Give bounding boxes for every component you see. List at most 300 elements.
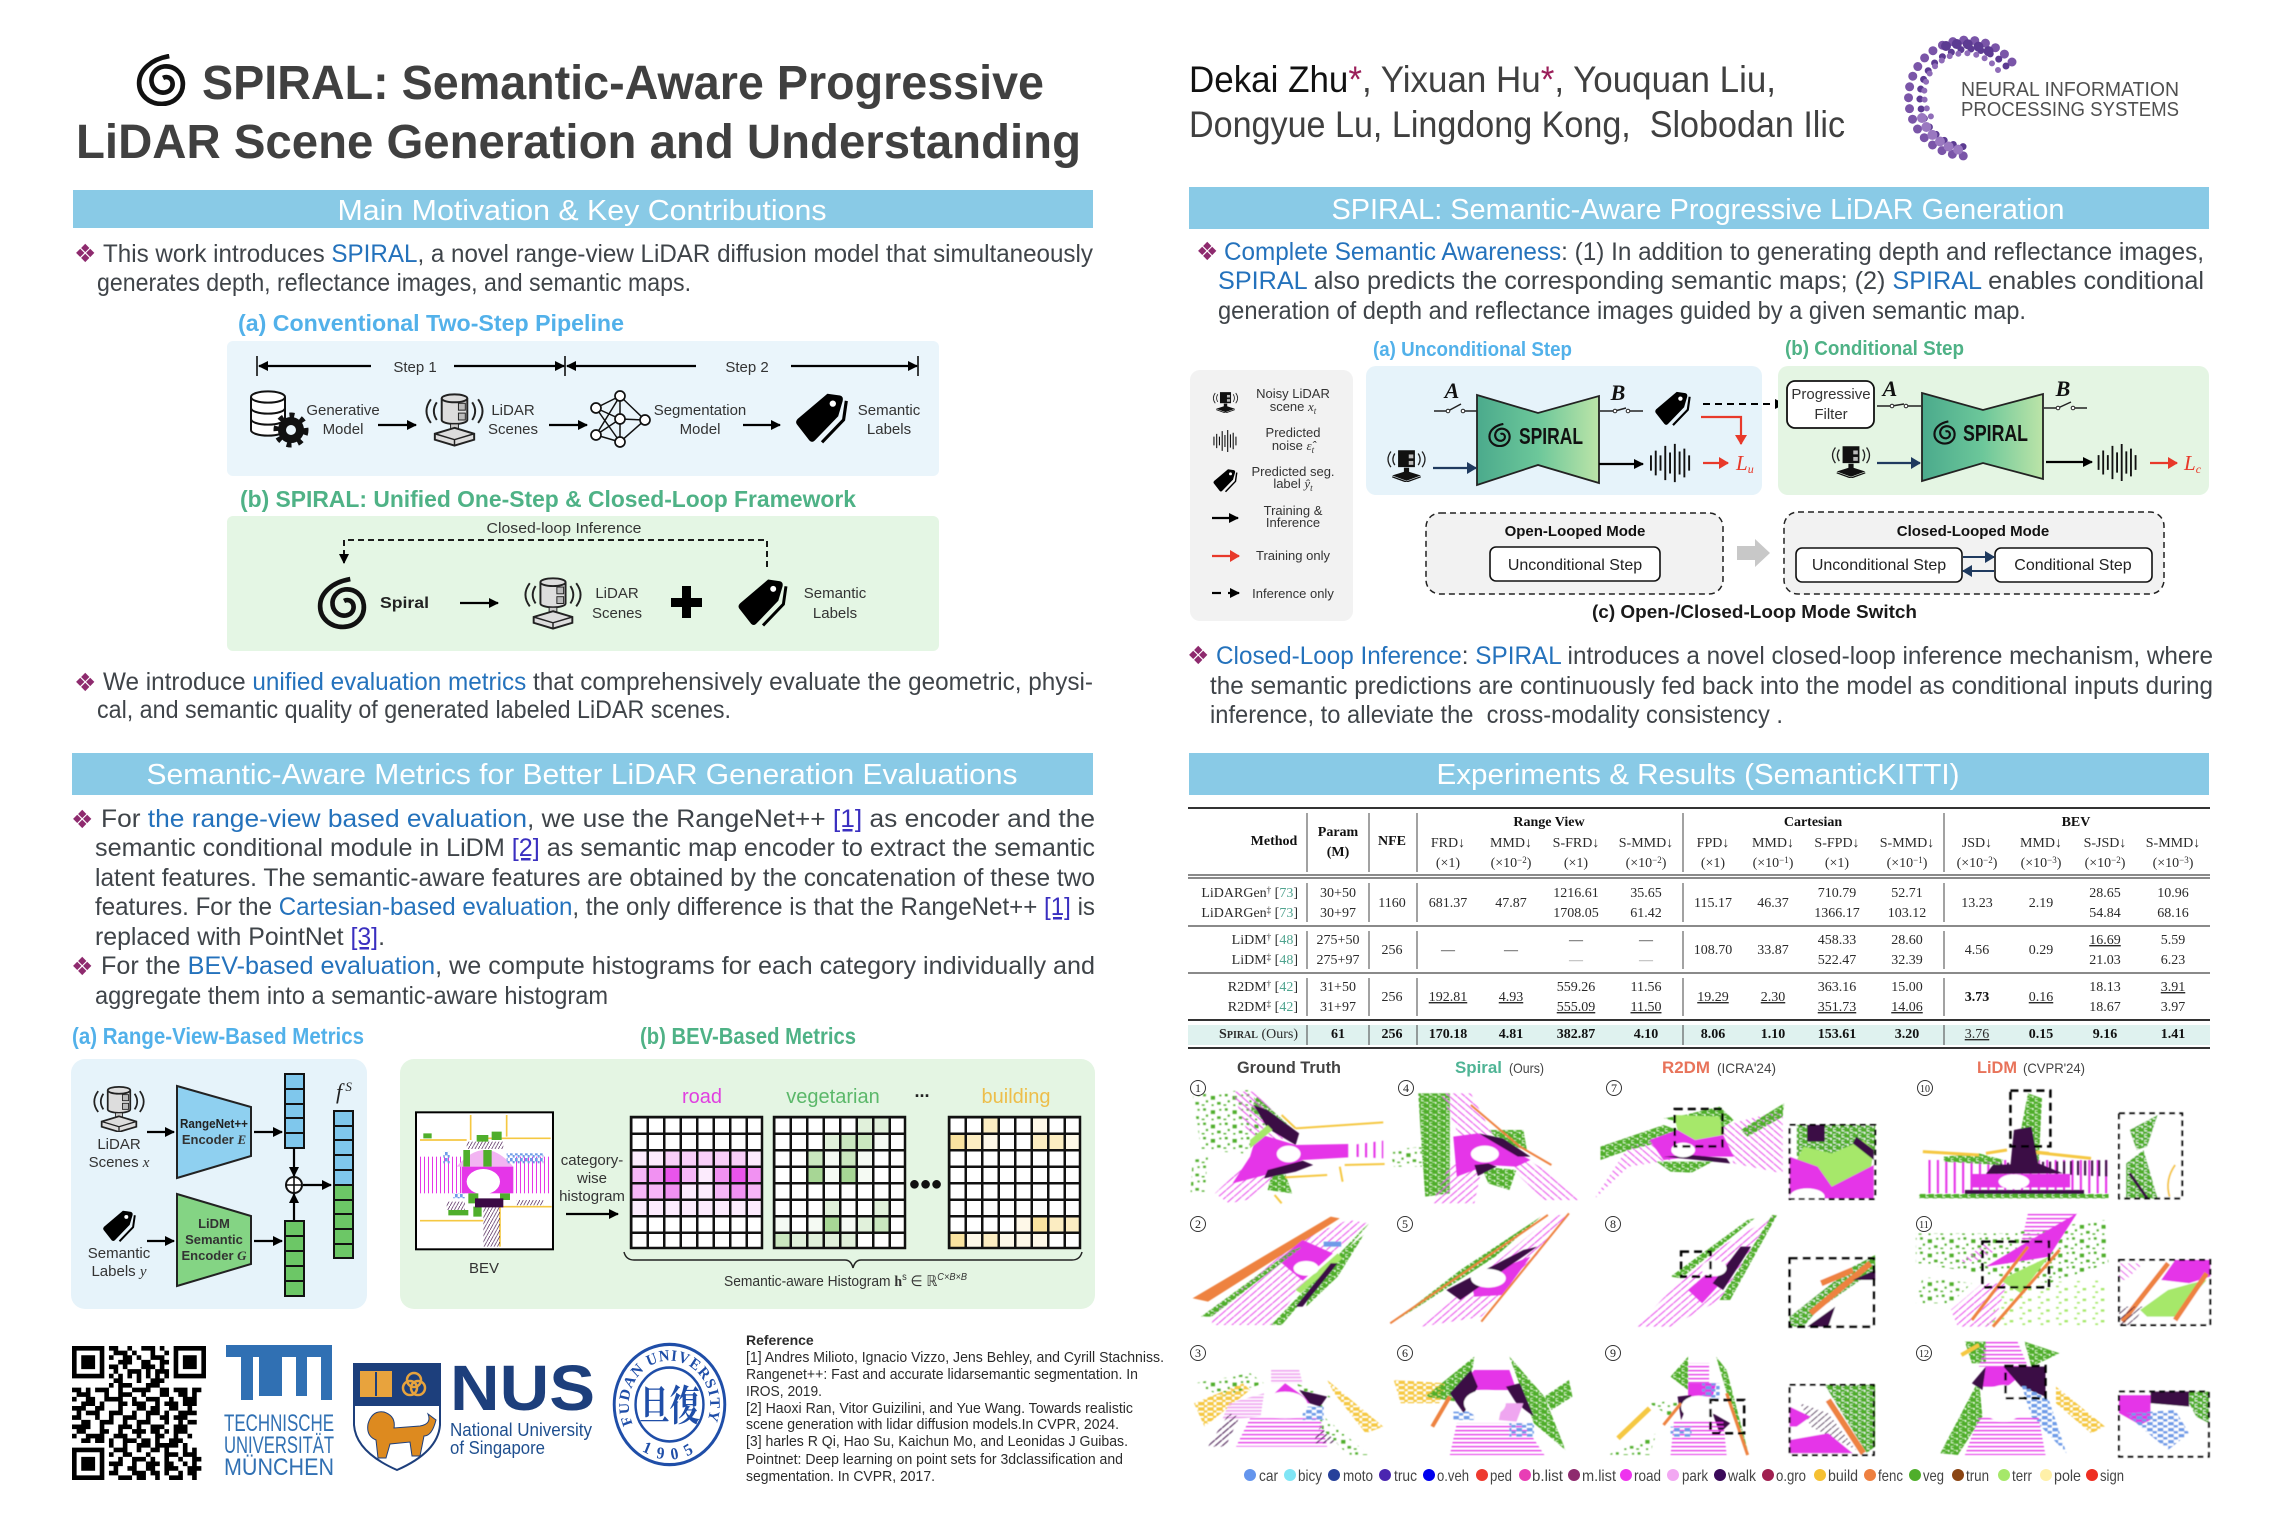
diagram: unconditional step (1366, 366, 1762, 495)
row: SPIRAL ours: Spiral (Ours) (1219, 1027, 1298, 1042)
row: SPIRAL ours: 153.61 (1818, 1027, 1856, 1042)
rows: LiDM: [ (1271, 953, 1280, 968)
rows: R2DM: 3.73 (1965, 990, 1989, 1005)
rows: R2DM: 15.00 (1891, 980, 1923, 995)
heading (72, 753, 1093, 795)
rows: R2DM: 363.16 (1818, 980, 1856, 995)
rows: LiDARGen: 10.96 (2157, 886, 2189, 901)
rows: R2DM: 4.93 (1499, 990, 1523, 1005)
authors (1189, 59, 1845, 145)
rows: LiDARGen: LiDARGen (1201, 886, 1267, 901)
diagram: conventional pipeline: LiDAR (491, 402, 535, 419)
logo: NeurIPS (1909, 40, 2179, 156)
rows: LiDM: [ (1271, 933, 1280, 948)
legend: t (1310, 483, 1313, 493)
legend: t (1312, 445, 1315, 455)
table header: MMD↓ (1490, 836, 1532, 851)
progressive filter (1787, 381, 1874, 428)
inset 9 (1790, 1385, 1875, 1455)
diagram: range-view metrics: Labels y (91, 1263, 147, 1280)
rows: LiDM: 48] (1279, 933, 1298, 948)
legend: Noisy LiDAR (1256, 386, 1330, 401)
diagram: spiral framework: LiDAR (595, 585, 639, 602)
column headers: qualitative comparison: Ground Truth (1237, 1058, 1341, 1077)
diagram: BEV metrics: BEV (469, 1260, 499, 1277)
heading: conventional pipeline: (a) Conventional Two-Step Pipeline (238, 310, 624, 336)
table header: (M) (1327, 845, 1350, 860)
fusion node (286, 1177, 302, 1193)
rows: R2DM: 555.09 (1557, 1000, 1595, 1015)
inset 11 (2119, 1260, 2210, 1325)
rows: R2DM: 2.30 (1761, 990, 1785, 1005)
row: SPIRAL ours: 4.81 (1499, 1027, 1523, 1042)
panel: open-looped mode: Open-Looped Mode (1505, 523, 1645, 540)
icon: database and gear (251, 391, 306, 445)
legend: semantic classes (1244, 1468, 2124, 1485)
table header: Method (1251, 834, 1298, 849)
legend: semantic classes: trun (1966, 1468, 1989, 1485)
title (76, 56, 1081, 169)
legend: scene x (1270, 399, 1314, 414)
BEV image (416, 1112, 553, 1249)
encoder: RangeNet++: RangeNet++ (180, 1116, 248, 1131)
rows: R2DM: R2DM (1228, 980, 1267, 995)
legend: Inference (1266, 515, 1320, 530)
logo: NeurIPS: PROCESSING SYSTEMS (1961, 99, 2179, 121)
column headers: qualitative comparison: LiDM (1977, 1058, 2017, 1077)
row: SPIRAL ours: 3.20 (1895, 1027, 1919, 1042)
scene 12 (1940, 1342, 2105, 1455)
text block: unified metrics bullet (74, 668, 1093, 724)
rows: LiDARGen: 681.37 (1429, 896, 1467, 911)
table header: S-JSD↓ (2084, 836, 2126, 851)
heading: Semantic-Aware Metrics for Better LiDAR Generation Evaluations (146, 759, 1017, 791)
references: segmentation. In CVPR, 2017. (746, 1468, 935, 1485)
table header: BEV (2062, 815, 2090, 830)
panel: closed-looped mode (1784, 512, 2164, 594)
inset 8 (1790, 1255, 1875, 1327)
diagram: range-view metrics: Semantic (88, 1245, 151, 1262)
diagram: spiral framework: Labels (813, 605, 857, 622)
heading: BEV metrics: (b) BEV-Based Metrics (640, 1023, 856, 1049)
text block: intro bullet: This work introduces SPIRAL, a novel range-view LiDAR diffusion model that simultaneously (103, 240, 1093, 268)
heading: SPIRAL: Semantic-Aware Progressive LiDAR Generation (1332, 194, 2064, 226)
legend: semantic classes: truc (1394, 1468, 1417, 1485)
rows: LiDM: 522.47 (1818, 953, 1856, 968)
diagram: conventional pipeline: Generative (306, 402, 380, 419)
diagram: BEV metrics: histogram (559, 1188, 625, 1205)
legend: semantic classes: park (1682, 1468, 1709, 1485)
rows: R2DM: [ (1271, 1000, 1280, 1015)
rows: R2DM: R2DM (1228, 1000, 1267, 1015)
logo: Fudan seal: 旦復 (639, 1371, 700, 1433)
rows: LiDARGen: 35.65 (1630, 886, 1662, 901)
text block: intro bullet (74, 239, 1093, 297)
table header: FRD↓ (1431, 836, 1465, 851)
table header: (×10 (1887, 856, 1913, 871)
rows: R2DM: 11.56 (1631, 980, 1661, 995)
rows: LiDM: 0.29 (2029, 943, 2053, 958)
scene 3 (1194, 1370, 1383, 1455)
rows: LiDM: — (1568, 933, 1584, 948)
legend: Predicted seg. (1251, 464, 1335, 479)
text block: complete semantic awareness: Complete Semantic Awareness: (1) In addition to generating depth and reflectance images, (1224, 238, 2204, 266)
rows: LiDM: 275+97 (1317, 953, 1359, 968)
table header: MMD↓ (2020, 836, 2062, 851)
table header: ) (2189, 856, 2194, 871)
row: SPIRAL ours: 1.41 (2161, 1027, 2185, 1042)
rows: LiDM: † (1267, 932, 1272, 942)
diagram: conventional pipeline (227, 341, 939, 476)
inset 10 (2119, 1113, 2182, 1198)
rows: LiDARGen: 61.42 (1630, 906, 1662, 921)
legend: semantic classes: fenc (1878, 1468, 1903, 1485)
SPIRAL block (1477, 395, 1599, 485)
legend: noise ε̂ (1272, 438, 1312, 453)
legend: semantic classes: veg (1923, 1468, 1944, 1485)
logo: NUS: of Singapore (450, 1438, 545, 1458)
text block: closed-loop inference: Closed-Loop Inference: SPIRAL introduces a novel closed-loop inference mechanism, where (1216, 642, 2213, 670)
table header: (×10 (1626, 856, 1652, 871)
table header: ) (1527, 856, 1532, 871)
rows: R2DM: 256 (1382, 990, 1402, 1005)
rows: LiDARGen (1201, 885, 2189, 921)
legend: semantic classes: walk (1727, 1468, 1757, 1485)
diagram: unconditional step: B (1610, 380, 1625, 405)
scene numbers: 12 (1919, 1349, 1929, 1360)
scene 8 (1636, 1215, 1777, 1327)
table header: S-MMD↓ (1619, 836, 1673, 851)
diagram: BEV metrics: Semantic-aware Histogram h (724, 1273, 905, 1290)
legend: semantic classes: ped (1490, 1468, 1512, 1485)
scene numbers (1190, 1080, 1932, 1360)
diagram: BEV metrics: wise (576, 1170, 607, 1187)
logo: Fudan seal (612, 1342, 726, 1466)
row: SPIRAL ours: 9.16 (2093, 1027, 2117, 1042)
rows: R2DM: 19.29 (1697, 990, 1729, 1005)
column headers: qualitative comparison (1237, 1058, 2085, 1077)
text block: metrics description (71, 805, 1095, 1010)
text block: unified metrics bullet: ❖ (74, 668, 96, 697)
row: SPIRAL ours: 3.76 (1965, 1027, 1989, 1042)
rows: LiDARGen: 28.65 (2089, 886, 2121, 901)
diagram: conventional pipeline: Scenes (488, 421, 538, 438)
logo: NUS: National University (450, 1420, 592, 1440)
panel: experiments and results (1188, 753, 2210, 1485)
SPIRAL block: SPIRAL (1519, 423, 1583, 449)
row: SPIRAL ours: 170.18 (1429, 1027, 1467, 1042)
rows: LiDARGen: 103.12 (1888, 906, 1926, 921)
diagram: spiral framework: Scenes (592, 605, 642, 622)
diagram: conventional pipeline: Step 1 (393, 359, 437, 376)
legend: semantic classes: terr (2012, 1468, 2033, 1485)
legend: semantic classes: sign (2100, 1468, 2124, 1485)
rows: LiDARGen: ‡ (1267, 905, 1272, 915)
text block: intro bullet: ❖ (74, 239, 96, 268)
rows: R2DM: 3.97 (2161, 1000, 2185, 1015)
SPIRAL block: SPIRAL (1963, 420, 2028, 446)
references: Rangenet++: Fast and accurate lidarsemantic segmentation. In (746, 1366, 1138, 1383)
icon: lidar (426, 394, 483, 446)
scene 7 (1593, 1103, 1784, 1200)
scene 1 (1191, 1090, 1385, 1203)
rows: LiDM: 4.56 (1965, 943, 1989, 958)
rows: LiDM: LiDM (1232, 933, 1267, 948)
grid: road (630, 1116, 762, 1248)
table header: (×10 (1753, 856, 1779, 871)
icon: tag (796, 394, 846, 442)
text block: metrics description: ❖ (71, 805, 93, 834)
icon: spiral (320, 579, 364, 627)
scene grid: point clouds (1191, 1090, 2210, 1457)
legend: Training & (1264, 503, 1323, 518)
scene numbers: 3 (1195, 1346, 1201, 1360)
progressive filter: Progressive (1791, 386, 1871, 403)
rows: LiDM: — (1638, 953, 1654, 968)
table header: (×10 (2085, 856, 2111, 871)
text block: complete semantic awareness: generation of depth and reflectance images guided by a given semantic map. (1218, 297, 2026, 325)
rows: LiDM: 21.03 (2089, 953, 2121, 968)
text block: closed-loop inference: ❖ (1187, 641, 1209, 670)
row: SPIRAL ours: 382.87 (1557, 1027, 1595, 1042)
encoder: LiDM: LiDM (198, 1216, 230, 1231)
feature stack: fused (334, 1111, 353, 1258)
panel: semantic-aware metrics (71, 753, 1095, 1309)
diagram: BEV metrics: category- (561, 1152, 623, 1169)
rows: LiDARGen: 2.19 (2029, 896, 2053, 911)
logo: NUS: NUS (450, 1352, 595, 1424)
rows: LiDARGen: 13.23 (1961, 896, 1993, 911)
results table (1188, 808, 2210, 1048)
QR code (72, 1346, 206, 1480)
diagram: BEV metrics (400, 1059, 1095, 1309)
legend: semantic classes: o.veh (1437, 1468, 1469, 1485)
progressive filter: Filter (1814, 406, 1848, 423)
diagram: conditional step: L (2184, 451, 2196, 475)
panel: closed-looped mode: Conditional Step (2014, 557, 2132, 574)
heading: spiral framework: (b) SPIRAL: Unified One-Step & Closed-Loop Framework (240, 486, 856, 512)
legend: semantic classes: road (1634, 1468, 1661, 1485)
table header: −3 (2047, 855, 2057, 865)
scene numbers: 6 (1402, 1346, 1408, 1360)
column headers: qualitative comparison: R2DM (1662, 1058, 1710, 1077)
rows: R2DM: 31+97 (1320, 1000, 1356, 1015)
references: [3] harles R Qi, Hao Su, Kaichun Mo, and Leonidas J Guibas. (746, 1433, 1128, 1450)
scene 11 (1916, 1213, 2109, 1327)
grid: building (948, 1116, 1080, 1248)
encoder: RangeNet++ (177, 1086, 251, 1178)
rows: R2DM: 31+50 (1320, 980, 1356, 995)
panel: SPIRAL generation (1187, 187, 2213, 729)
scene 2 (1193, 1217, 1369, 1325)
inset 7 (1790, 1125, 1875, 1205)
encoder: LiDM: Encoder G (181, 1248, 247, 1263)
panel: open-looped mode: Unconditional Step (1508, 557, 1642, 574)
row: SPIRAL ours: 8.06 (1701, 1027, 1725, 1042)
heading: conditional step: (b) Conditional Step (1785, 338, 1964, 360)
rows: LiDARGen: 68.16 (2157, 906, 2189, 921)
scene numbers: 7 (1611, 1081, 1617, 1095)
scene numbers: 11 (1919, 1220, 1929, 1231)
rows: LiDM: — (1568, 953, 1584, 968)
column headers: qualitative comparison: (Ours) (1509, 1060, 1544, 1076)
rows: LiDM: 458.33 (1818, 933, 1856, 948)
references: [1] Andres Milioto, Ignacio Vizzo, Jens Behley, and Cyrill Stachniss. (746, 1349, 1164, 1366)
diagram: range-view metrics: S (342, 1079, 352, 1094)
diagram: range-view metrics: Scenes x (89, 1154, 150, 1171)
panel: open-looped mode (1426, 513, 1723, 594)
references: Pointnet: Deep learning on point sets for 3dclassification and (746, 1451, 1123, 1468)
scene 5 (1390, 1213, 1569, 1327)
table header: −2 (1652, 855, 1662, 865)
rows: LiDM: 108.70 (1694, 943, 1732, 958)
table header: ) (1789, 856, 1794, 871)
row: SPIRAL ours: 61 (1331, 1027, 1345, 1042)
diagram: range-view metrics (71, 1059, 367, 1309)
text block: metrics description: ❖ (71, 952, 93, 981)
diagram: spiral framework: Semantic (804, 585, 867, 602)
text block: metrics description: aggregate them into a semantic-aware histogram (95, 982, 608, 1010)
table header: −2 (1517, 855, 1527, 865)
feature stack: range (285, 1074, 304, 1148)
heading: Experiments & Results (SemanticKITTI) (1436, 759, 1960, 791)
text block: metrics description: features. For the Cartesian-based evaluation, the only difference is that the RangeNet++ [1] is (95, 893, 1095, 921)
legend (1190, 370, 1353, 621)
text block: complete semantic awareness (1196, 237, 2204, 325)
rows: LiDARGen: 46.37 (1757, 896, 1789, 911)
arrow: mode switch (1737, 539, 1770, 567)
rows: LiDARGen: [ (1271, 886, 1280, 901)
rows: R2DM: 559.26 (1557, 980, 1595, 995)
column headers: qualitative comparison: (ICRA'24) (1717, 1060, 1776, 1076)
rows: LiDM: 16.69 (2089, 933, 2121, 948)
table header: ) (2121, 856, 2126, 871)
diagram: spiral framework (227, 516, 939, 651)
title: SPIRAL: Semantic-Aware Progressive (202, 57, 1044, 110)
text block: unified metrics bullet: We introduce unified evaluation metrics that comprehensively evaluate the geometric, physi- (103, 668, 1093, 696)
rows: R2DM: 3.91 (2161, 980, 2185, 995)
diagram: conventional pipeline: Segmentation (654, 402, 746, 419)
rows: LiDM: 275+50 (1317, 933, 1359, 948)
table header: ) (2057, 856, 2062, 871)
scene numbers: 9 (1610, 1346, 1616, 1360)
scene numbers: 10 (1920, 1084, 1930, 1095)
text block: complete semantic awareness: ❖ (1196, 237, 1218, 266)
table header: Range View (1513, 815, 1585, 830)
rows: LiDARGen: [ (1271, 906, 1280, 921)
rows: R2DM: [ (1271, 980, 1280, 995)
diagram: unconditional step: L (1736, 451, 1748, 475)
caption: mode switch: (c) Open-/Closed-Loop Mode Switch (1592, 602, 1917, 622)
rows: LiDARGen: 1160 (1378, 896, 1406, 911)
diagram: conventional pipeline: Model (323, 421, 363, 438)
heading: unconditional step: (a) Unconditional Step (1373, 339, 1572, 361)
logo: NeurIPS: NEURAL INFORMATION (1961, 79, 2179, 101)
arrow: dashed to conditional (1703, 403, 1784, 405)
logo: Fudan seal: 1905 (642, 1442, 692, 1460)
references: Reference (746, 1332, 814, 1348)
diagram: BEV metrics: ∈ ℝ (907, 1273, 937, 1290)
heading: Main Motivation & Key Contributions (338, 195, 826, 227)
table header: (×1) (1825, 856, 1849, 871)
diagram: unconditional step: A (1443, 378, 1459, 403)
column headers: qualitative comparison: Spiral (1455, 1058, 1502, 1077)
table header: Param (1318, 825, 1359, 840)
rows: LiDARGen: 30+50 (1320, 886, 1356, 901)
encoder: LiDM: Semantic (185, 1232, 243, 1247)
diagram: BEV metrics: s (902, 1272, 907, 1283)
rows: LiDM: 32.39 (1891, 953, 1923, 968)
references (746, 1332, 1164, 1485)
rows: LiDM: 5.59 (2161, 933, 2185, 948)
diagram: unconditional step: u (1748, 462, 1754, 476)
diagram: conventional pipeline: Step 2 (725, 359, 769, 376)
diagram: BEV metrics: building (982, 1086, 1050, 1108)
encoder: RangeNet++: Encoder E (182, 1132, 246, 1147)
table header: −1 (1913, 855, 1923, 865)
table header: Cartesian (1784, 815, 1842, 830)
rows: LiDM: 6.23 (2161, 953, 2185, 968)
legend: Training only (1256, 548, 1330, 563)
text block: unified metrics bullet: cal, and semantic quality of generated labeled LiDAR scenes. (97, 696, 731, 724)
scene numbers: 1 (1195, 1081, 1201, 1095)
table header: (×1) (1436, 856, 1460, 871)
table header (1251, 815, 2200, 871)
rows: LiDM: 33.87 (1757, 943, 1789, 958)
rows: LiDARGen: 73] (1279, 906, 1298, 921)
table header: (×10 (1491, 856, 1517, 871)
rows: R2DM: 42] (1279, 980, 1298, 995)
feature stack: semantic (285, 1221, 304, 1296)
inset 12 (2119, 1392, 2209, 1457)
table header: FPD↓ (1697, 836, 1729, 851)
text block: metrics description: replaced with PointNet [3]. (95, 923, 385, 951)
heading (1189, 187, 2209, 229)
grid: vegetation (773, 1116, 905, 1248)
rows: LiDARGen: 1216.61 (1553, 886, 1599, 901)
logo: NUS (354, 1352, 595, 1470)
table header: MMD↓ (1752, 836, 1794, 851)
legend: semantic classes: m.list (1582, 1468, 1617, 1485)
scene numbers: 8 (1610, 1217, 1616, 1231)
text block: metrics description: semantic conditional module in LiDM [2] as semantic map encoder to extract the semantic (95, 834, 1095, 862)
icon: plus (671, 586, 702, 618)
references: [2] Haoxi Ran, Vitor Guizilini, and Yue Wang. Towards realistic (746, 1400, 1133, 1417)
rows: LiDM: — (1440, 943, 1456, 958)
panel: closed-looped mode: Closed-Looped Mode (1897, 523, 2049, 540)
row: SPIRAL ours: 256 (1382, 1027, 1402, 1042)
diagram: conditional step (1778, 366, 2209, 495)
logo: TUM (224, 1345, 334, 1481)
text block: complete semantic awareness: SPIRAL also predicts the corresponding semantic maps; (2) SPIRAL enables conditional (1218, 267, 2204, 295)
rows: LiDARGen: 710.79 (1818, 886, 1856, 901)
rows: LiDARGen: 54.84 (2089, 906, 2121, 921)
table header: −1 (1779, 855, 1789, 865)
rows: R2DM: 351.73 (1818, 1000, 1856, 1015)
legend: semantic classes: build (1828, 1468, 1858, 1485)
scene 9 (1607, 1357, 1748, 1455)
scene 6 (1394, 1357, 1572, 1455)
text block: metrics description: For the range-view based evaluation , we use the RangeNet++ [1] as encoder and the (101, 805, 1095, 833)
diagram: range-view metrics: LiDAR (97, 1136, 141, 1153)
table header: (×10 (1957, 856, 1983, 871)
table header: S-MMD↓ (1880, 836, 1934, 851)
legend: Inference only (1252, 586, 1334, 601)
scene 4 (1390, 1093, 1579, 1203)
authors: Dekai Zhu*, Yixuan Hu*, Youquan Liu, (1189, 59, 1776, 100)
diagram: range-view metrics: f (336, 1079, 342, 1104)
rows: R2DM: 192.81 (1429, 990, 1467, 1005)
